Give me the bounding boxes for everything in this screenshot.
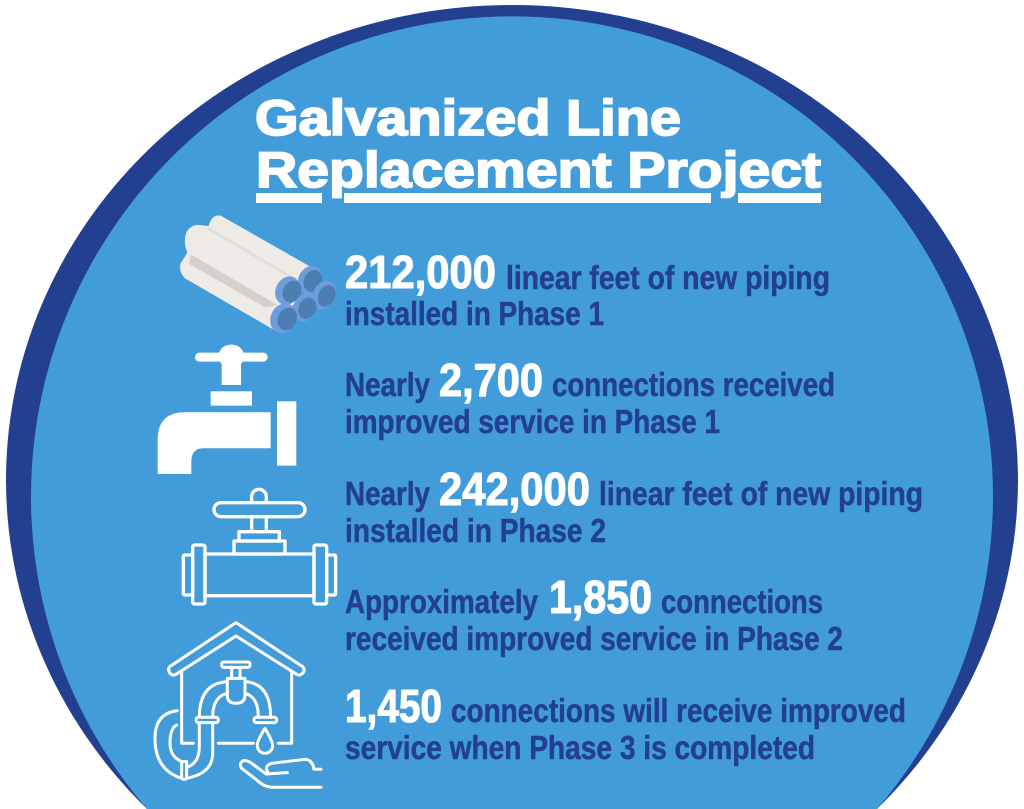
title: Replacement Project [256,142,821,198]
stat: Phase 3 connections: connections will receive improved [451,692,906,729]
title [255,90,821,203]
stat: Phase 1 connections: Nearly [345,366,431,403]
stat: Phase 1 piping [345,246,830,332]
stat: Phase 1 piping: linear feet of new piping [506,259,830,296]
stat: Phase 2 piping [345,463,923,549]
stat: Phase 1 connections: connections received [552,366,835,403]
stat: Phase 2 piping: 242,000 [439,463,590,515]
stat: Phase 1 connections: 2,700 [439,354,543,406]
stat: Phase 1 connections: improved service in Phase 1 [345,403,720,440]
stat: Phase 3 connections: 1,450 [345,680,442,732]
stat: Phase 2 connections [345,571,843,657]
stat: Phase 2 connections: received improved service in Phase 2 [345,620,843,657]
stat: Phase 1 connections [345,354,835,440]
stat: Phase 2 connections: connections [661,583,823,620]
icon: outlined pipe valve [183,489,336,604]
stat: Phase 1 piping: installed in Phase 1 [345,295,604,332]
stat: Phase 1 piping: 212,000 [345,246,496,298]
stat: Phase 2 connections: Approximately [345,583,539,620]
stat: Phase 3 connections: service when Phase 3 is completed [345,729,815,766]
title: Galvanized Line [255,90,681,146]
stat: Phase 2 connections: 1,850 [549,571,652,623]
icon: pipe bundle [180,215,340,338]
stat: Phase 3 connections [345,680,906,766]
stat: Phase 2 piping: linear feet of new piping [599,475,923,512]
icon: solid faucet [158,345,296,474]
icon: house with plumbing and water drop [155,623,321,787]
stat: Phase 2 piping: installed in Phase 2 [345,512,606,549]
stat: Phase 2 piping: Nearly [345,475,431,512]
